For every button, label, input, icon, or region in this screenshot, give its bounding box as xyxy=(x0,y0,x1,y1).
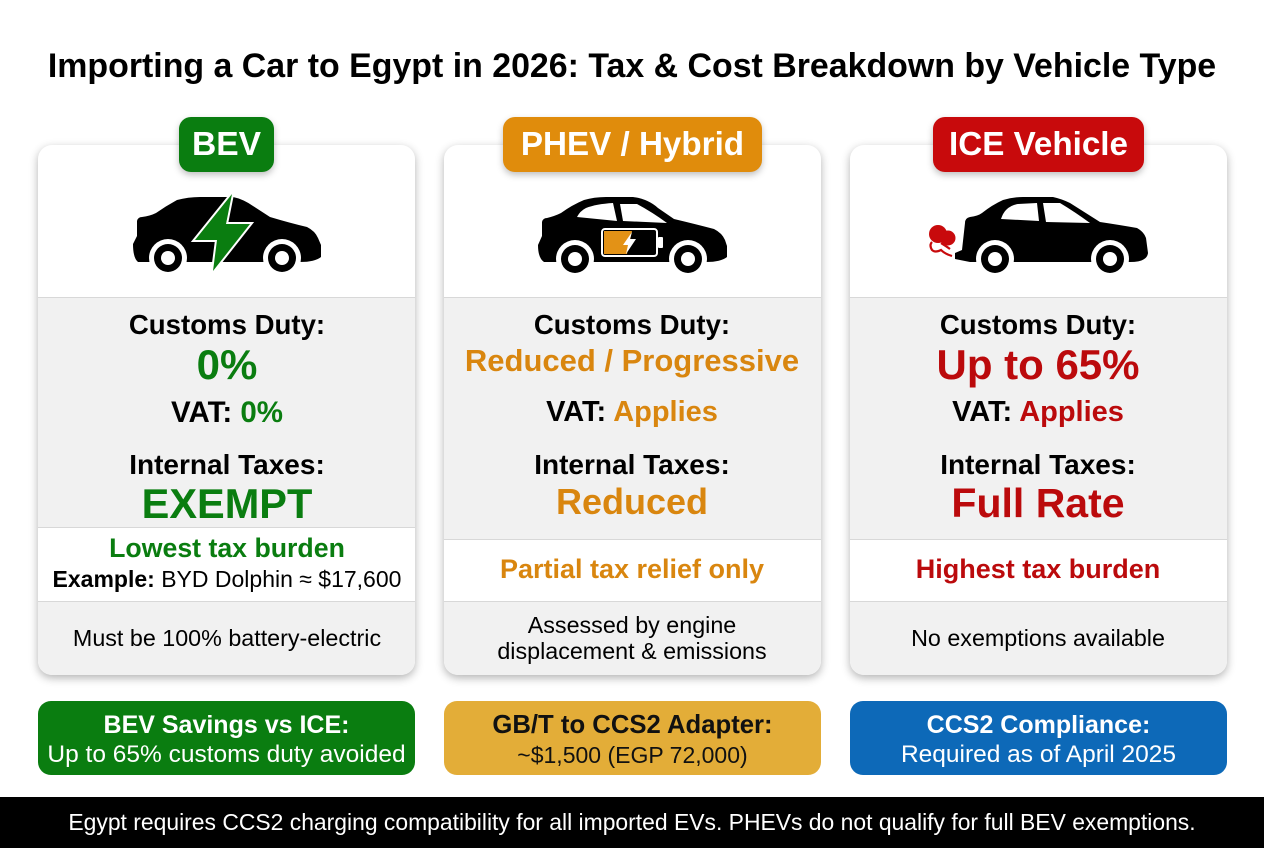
badge: ICE xyxy=(933,117,1144,172)
callout: adapter: GB/T to CCS2 Adapter: xyxy=(492,711,773,739)
customs duty label: Customs Duty: xyxy=(129,309,325,340)
callout: BEV savings: Up to 65% customs duty avoided xyxy=(47,741,406,768)
badge: BEV: BEV xyxy=(192,126,261,163)
internal taxes value: Reduced xyxy=(556,481,708,522)
callout: BEV savings: BEV Savings vs ICE: xyxy=(104,711,349,739)
VAT: VAT: Applies xyxy=(952,396,1124,428)
customs duty value: Reduced / Progressive xyxy=(465,343,799,378)
internal taxes value: Full Rate xyxy=(951,480,1125,526)
footer banner xyxy=(0,797,1264,848)
exemption note: No exemptions available xyxy=(911,625,1165,651)
badge: BEV xyxy=(179,117,274,172)
internal taxes label: Internal Taxes: xyxy=(940,449,1136,480)
example: Example: BYD Dolphin ≈ $17,600 xyxy=(53,566,401,592)
burden note: Highest tax burden xyxy=(916,554,1160,584)
internal taxes label: Internal Taxes: xyxy=(534,449,730,480)
eligibility note: Must be 100% battery-electric xyxy=(73,625,381,651)
assessment note xyxy=(497,612,767,664)
internal taxes value: EXEMPT xyxy=(142,480,312,527)
footer banner: Egypt requires CCS2 charging compatibility for all imported EVs. PHEVs do not qualify for full BEV exemptions. xyxy=(68,809,1196,835)
customs duty label: Customs Duty: xyxy=(534,309,730,340)
badge: PHEV xyxy=(503,117,762,172)
burden note: Partial tax relief only xyxy=(500,554,764,584)
panel: BEV xyxy=(32,116,420,684)
callout: CCS2 compliance xyxy=(850,701,1227,775)
panel: PHEV xyxy=(438,116,826,684)
callout: CCS2 compliance: Required as of April 2025 xyxy=(901,741,1176,768)
callout: adapter xyxy=(444,701,821,775)
panel: ICE xyxy=(844,116,1232,684)
customs duty label: Customs Duty: xyxy=(940,309,1136,340)
badge: PHEV: PHEV / Hybrid xyxy=(521,126,744,163)
callout: adapter: ~$1,500 (EGP 72,000) xyxy=(517,742,748,768)
burden note: Lowest tax burden xyxy=(109,533,345,563)
badge: ICE: ICE Vehicle xyxy=(949,126,1128,163)
title: Importing a Car to Egypt in 2026: Tax & Cost Breakdown by Vehicle Type xyxy=(48,47,1216,85)
customs duty value: 0% xyxy=(197,341,257,388)
internal taxes label: Internal Taxes: xyxy=(129,449,325,480)
customs duty value: Up to 65% xyxy=(936,341,1140,388)
callout: CCS2 compliance: CCS2 Compliance: xyxy=(927,711,1150,739)
assessment note: Assessed by engine xyxy=(528,612,736,638)
assessment note: displacement & emissions xyxy=(497,638,767,664)
callout: BEV savings xyxy=(38,701,415,775)
VAT: VAT: 0% xyxy=(171,396,283,429)
VAT: VAT: Applies xyxy=(546,396,718,428)
